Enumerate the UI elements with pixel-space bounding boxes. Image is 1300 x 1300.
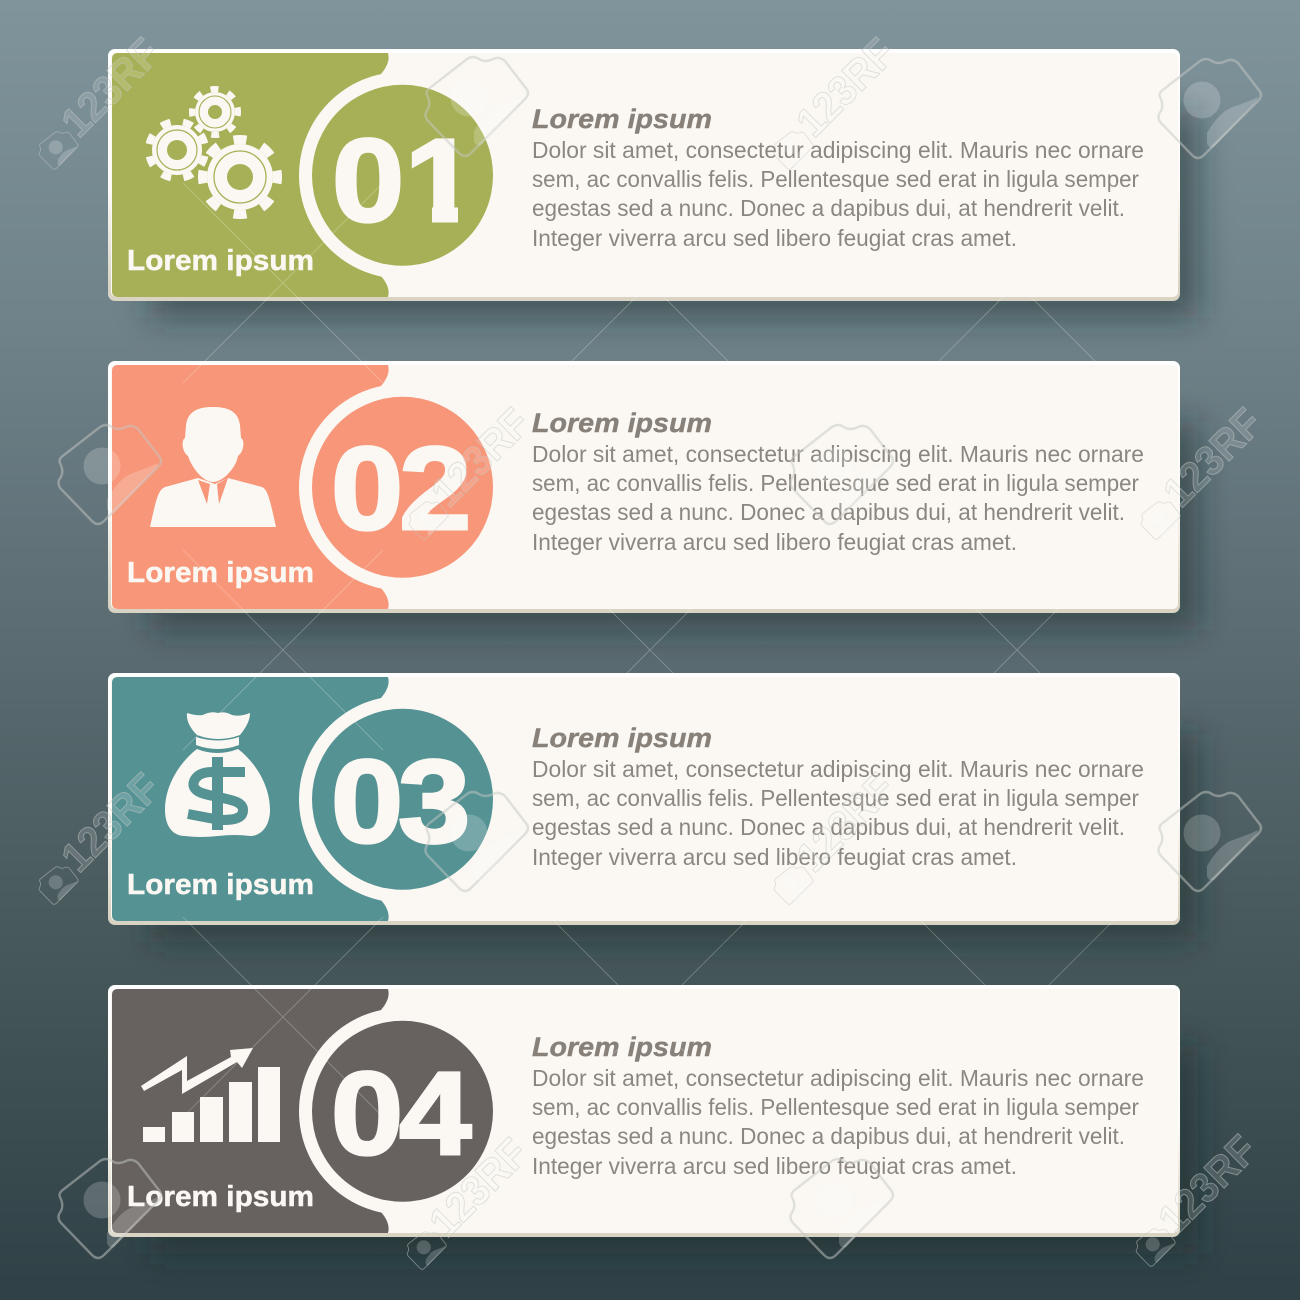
body text: Dolor sit amet, consectetur adipiscing elit. Mauris nec ornare — [532, 756, 1144, 782]
number: 03 — [331, 736, 470, 868]
number disc — [312, 397, 493, 578]
heading: Lorem ipsum — [532, 104, 712, 134]
icon: growth chart — [141, 1048, 280, 1142]
card shadows — [150, 110, 1198, 1254]
body text — [532, 137, 1144, 251]
tab label: Lorem ipsum — [127, 245, 314, 277]
number: 02 — [331, 423, 471, 555]
card body — [111, 677, 1178, 921]
number ring — [299, 384, 506, 591]
body text: sem, ac convallis felis. Pellentesque sed erat in ligula semper — [532, 785, 1139, 811]
number disc — [312, 709, 493, 890]
icon: businessman — [150, 407, 276, 527]
card frame — [108, 49, 1180, 301]
body text: Integer viverra arcu sed libero feugiat cras amet. — [532, 225, 1017, 251]
number: 01 — [332, 115, 477, 247]
body text: egestas sed a nunc. Donec a dapibus dui, at hendrerit velit. — [532, 499, 1125, 525]
body text: egestas sed a nunc. Donec a dapibus dui, at hendrerit velit. — [532, 814, 1125, 840]
numeral foot trim — [402, 206, 475, 226]
colour tab — [112, 53, 389, 297]
body text: Dolor sit amet, consectetur adipiscing elit. Mauris nec ornare — [532, 137, 1144, 163]
heading: Lorem ipsum — [532, 1032, 712, 1062]
watermark: stock photo logos: 123RF — [787, 764, 904, 881]
watermark: stock photo logos: 123RF — [787, 29, 904, 146]
tab label: Lorem ipsum — [127, 557, 314, 589]
number: 04 — [331, 1048, 471, 1180]
watermark: stock photo logos: 123RF — [1154, 399, 1271, 516]
icon: gears — [140, 89, 278, 214]
watermark: stock photo logos: 123RF — [52, 764, 169, 881]
icon: money bag — [165, 712, 270, 837]
body text: egestas sed a nunc. Donec a dapibus dui, at hendrerit velit. — [532, 1123, 1125, 1149]
panel: card 01 — [108, 49, 1180, 301]
number ring — [299, 696, 506, 903]
watermark: stock photo logos: 123RF — [1149, 1126, 1266, 1243]
panel: card 02 — [108, 361, 1180, 613]
body text: sem, ac convallis felis. Pellentesque sed erat in ligula semper — [532, 166, 1139, 192]
body text: Dolor sit amet, consectetur adipiscing elit. Mauris nec ornare — [532, 1065, 1144, 1091]
card body — [111, 365, 1178, 609]
card frame — [108, 673, 1180, 925]
number ring — [299, 1008, 506, 1215]
panel: card 03 — [108, 673, 1180, 925]
colour tab — [112, 677, 389, 921]
body text — [532, 756, 1144, 870]
watermark: stock photo logos: 123RF — [422, 399, 539, 516]
card frame — [108, 361, 1180, 613]
card frame — [108, 985, 1180, 1237]
number disc — [312, 85, 493, 266]
heading: Lorem ipsum — [532, 408, 712, 438]
body text: sem, ac convallis felis. Pellentesque sed erat in ligula semper — [532, 470, 1139, 496]
colour tab — [112, 365, 389, 609]
body text: Integer viverra arcu sed libero feugiat cras amet. — [532, 844, 1017, 870]
body text — [532, 1065, 1144, 1179]
tab label: Lorem ipsum — [127, 1181, 314, 1213]
watermark: stock photo logos: 123RF — [52, 29, 169, 146]
watermark: crossing hairlines — [183, 183, 1117, 1117]
tab label: Lorem ipsum — [127, 869, 314, 901]
card body — [111, 989, 1178, 1233]
watermark: stock photo logos: 123RF — [420, 1129, 537, 1246]
body text: egestas sed a nunc. Donec a dapibus dui, at hendrerit velit. — [532, 195, 1125, 221]
body text: sem, ac convallis felis. Pellentesque sed erat in ligula semper — [532, 1094, 1139, 1120]
colour tab — [112, 989, 389, 1233]
body text: Integer viverra arcu sed libero feugiat cras amet. — [532, 529, 1017, 555]
card body — [111, 53, 1178, 297]
number disc — [312, 1021, 493, 1202]
body text: Integer viverra arcu sed libero feugiat cras amet. — [532, 1153, 1017, 1179]
heading: Lorem ipsum — [532, 723, 712, 753]
number ring — [299, 72, 506, 279]
body text — [532, 441, 1144, 555]
panel: card 04 — [108, 985, 1180, 1237]
body text: Dolor sit amet, consectetur adipiscing elit. Mauris nec ornare — [532, 441, 1144, 467]
